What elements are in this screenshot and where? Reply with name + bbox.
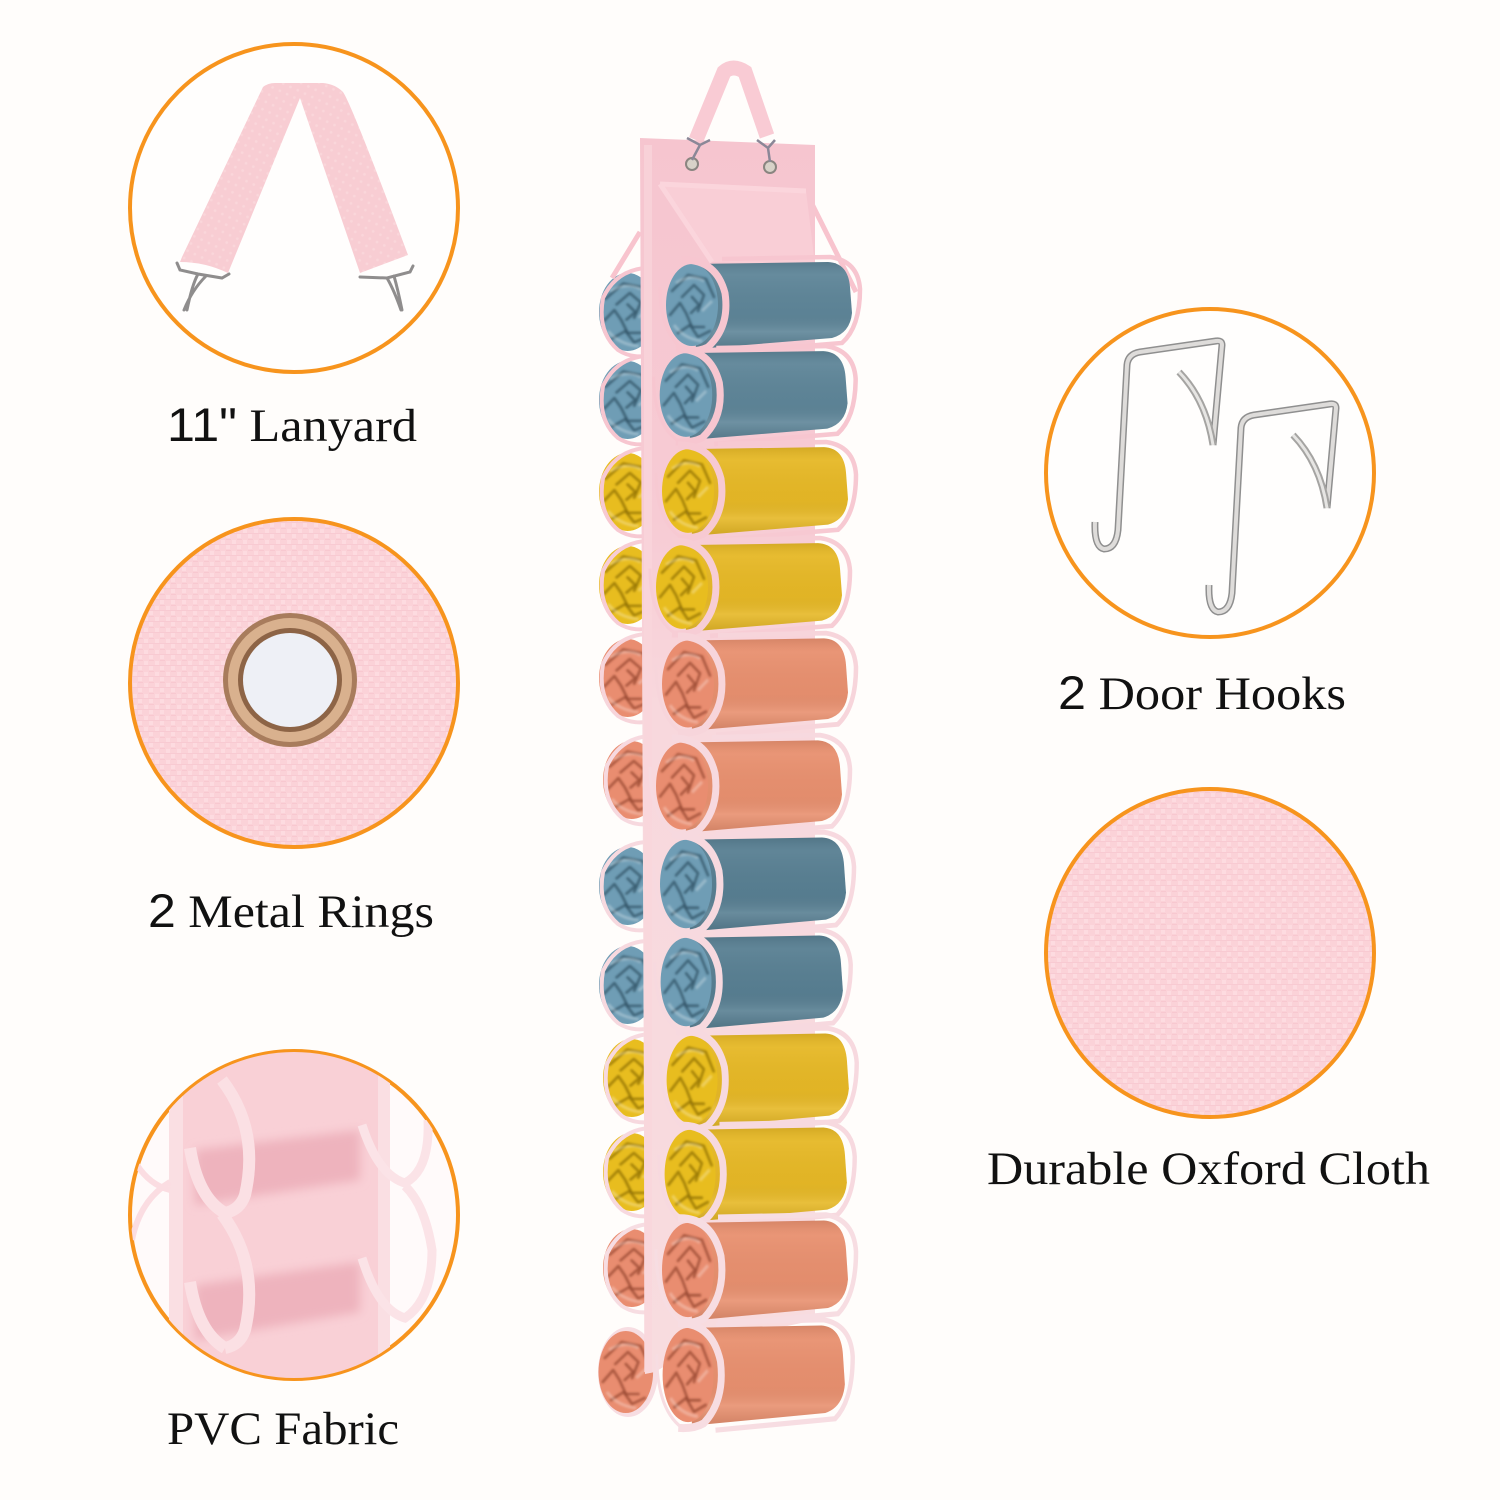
- icon: clear PVC pockets: [132, 1050, 432, 1390]
- handle strap: [696, 68, 767, 140]
- upper side straps: [612, 190, 856, 292]
- panel: 11 inch lanyard: [130, 44, 458, 452]
- icon: left metal clip: [177, 263, 229, 310]
- panel: 2 metal rings: [130, 519, 458, 938]
- circle: lanyard detail: [130, 44, 458, 372]
- icon: front door hook: [1209, 404, 1336, 612]
- metal grommets: [686, 138, 776, 173]
- panel border: [644, 145, 652, 1372]
- panel: durable Oxford cloth: [987, 789, 1430, 1195]
- circle: Oxford cloth swatch: [1046, 789, 1374, 1117]
- circle: PVC detail: [130, 1051, 458, 1379]
- top pocket flap: [660, 184, 815, 265]
- label: metal rings: 2 Metal Rings: [148, 884, 434, 938]
- icon: back door hook: [1095, 341, 1222, 549]
- circle: metal ring detail: [130, 519, 458, 847]
- panel: PVC fabric: [130, 1050, 458, 1455]
- label: door hooks: 2 Door Hooks: [1058, 666, 1346, 720]
- icon: pink lanyard strap: [180, 83, 408, 273]
- label: PVC fabric: PVC Fabric: [167, 1403, 399, 1455]
- circle: door hook detail: [1046, 309, 1374, 637]
- left pocket rolls: [598, 268, 660, 1417]
- right pocket rolls: [650, 257, 860, 1430]
- backing panel: [640, 138, 815, 1374]
- icon: metal eyelet: [223, 613, 357, 747]
- label: Oxford cloth: Durable Oxford Cloth: [987, 1143, 1430, 1195]
- panel: 2 door hooks: [1046, 309, 1374, 720]
- label: lanyard: 11" Lanyard: [167, 398, 417, 452]
- product: hanging organizer: [598, 68, 860, 1430]
- icon: right metal clip: [360, 266, 413, 310]
